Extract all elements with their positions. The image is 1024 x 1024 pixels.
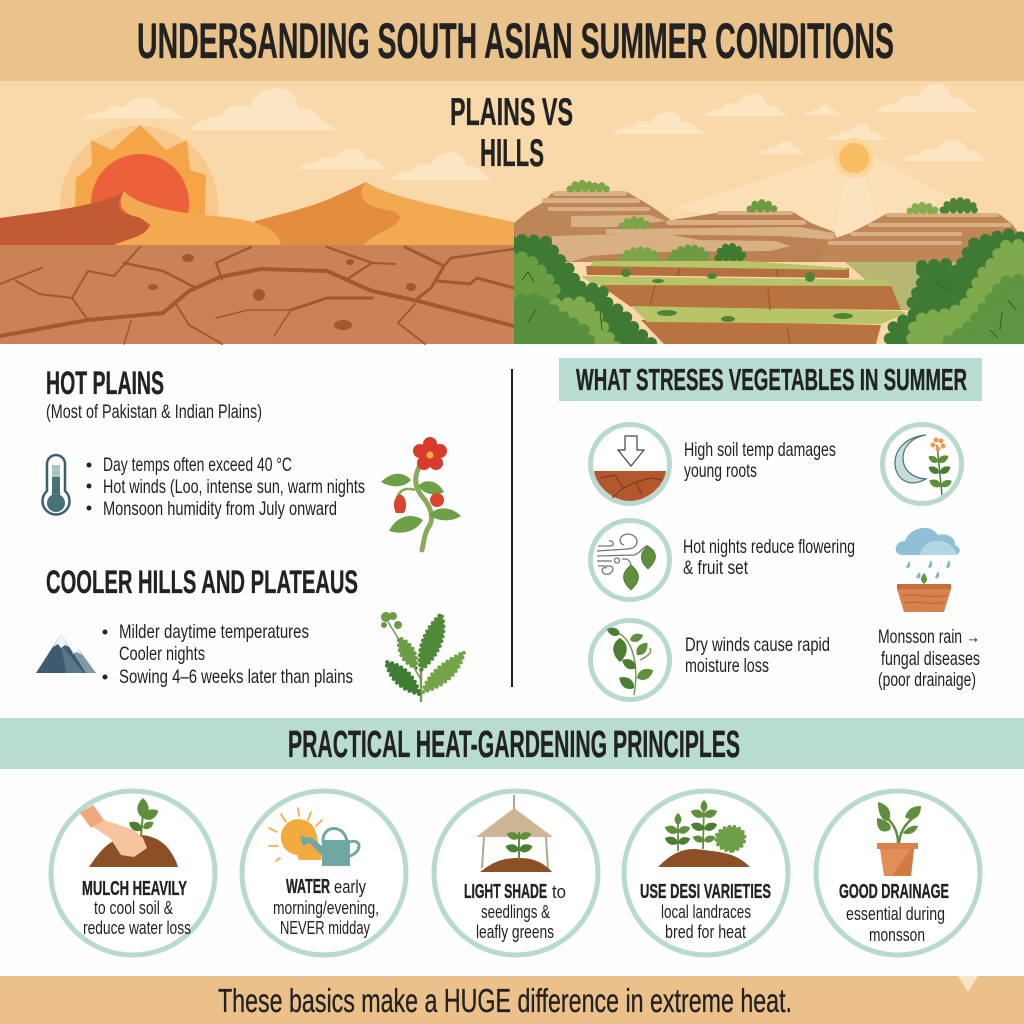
cracked earth ground [0, 245, 514, 344]
right bushes [886, 234, 1024, 350]
stress text: hot nights [683, 536, 855, 579]
text: mulch [82, 878, 191, 938]
text: mulch: reduce water loss [83, 918, 191, 938]
footer band [0, 976, 1024, 1024]
hill bushes [570, 183, 976, 258]
principle: light shade [434, 791, 598, 955]
text: water: early [334, 877, 366, 897]
bush foliage marks [522, 272, 602, 330]
header band [0, 0, 1024, 81]
stress text: soil temp [684, 439, 836, 482]
text: drainage: essential during [846, 904, 945, 924]
text: mulch: MULCH HEAVILY [82, 878, 187, 900]
stress text: dry winds [685, 634, 830, 677]
stress text: monsoon rain [878, 626, 980, 691]
text: drainage [839, 881, 949, 945]
foreground terraces [581, 261, 907, 344]
icon: blazing sun [60, 125, 218, 284]
icon: shade shelter [476, 795, 553, 872]
bullet list: hills conditions: Sowing 4–6 weeks later than plains [119, 666, 353, 688]
icon: mountains [36, 634, 96, 673]
hero scene: plains vs hills [0, 81, 1024, 350]
icon: red flowering plant [381, 437, 461, 550]
heading: hot plains: HOT PLAINS [46, 365, 164, 401]
text: water: WATER [286, 876, 330, 898]
stress text: soil temp: young roots [684, 460, 757, 482]
text: mulch: to cool soil & [94, 898, 173, 918]
stress text: monsoon rain: (poor drainaige) [878, 669, 976, 691]
icon: moon and flowering plant [882, 424, 962, 504]
icon: sun and watering can [269, 808, 359, 866]
stress text: dry winds: moisture loss [685, 655, 769, 677]
subheading: (Most of Pakistan & Indian Plains) [46, 402, 262, 423]
text: water: morning/evening, [273, 898, 379, 918]
icon: potted plant [877, 802, 921, 876]
olive meadow [845, 262, 965, 310]
icon: hand mulching [80, 798, 178, 867]
text: drainage: monsson [869, 925, 925, 945]
back-left hill [514, 191, 671, 262]
text: light shade: LIGHT SHADE [464, 881, 547, 903]
stress text: hot nights: Hot nights reduce flowering [683, 536, 855, 558]
heading: plains vs hills: PLAINS VS [450, 91, 573, 134]
principle: mulch heavily [51, 791, 215, 955]
heading: plains vs hills [450, 91, 573, 175]
icon: dry-wind vine [590, 620, 670, 700]
principle: water timing [242, 791, 406, 955]
text: desi: bred for heat [665, 922, 746, 942]
bullet list: plains conditions [86, 454, 365, 520]
icon: thermometer [43, 455, 70, 515]
bullet list: hills conditions: Cooler nights [119, 643, 205, 665]
text: desi: USE DESI VARIETIES [640, 881, 771, 903]
text: light shade: to [552, 882, 566, 902]
principle: good drainage [816, 791, 980, 955]
bullet list: plains conditions: Monsoon humidity from July onward [103, 498, 337, 520]
bullet list: hills conditions [102, 621, 353, 688]
icon: hazy hill sun [672, 138, 1000, 250]
icon: desi plants in soil [658, 800, 750, 867]
stress text: soil temp: High soil temp damages [684, 439, 836, 461]
bush foliage marks [936, 282, 1016, 338]
text: desi [640, 881, 771, 942]
panel: what stresses vegetables [559, 358, 982, 700]
icon: hot soil and arrow [590, 424, 670, 504]
text: light shade [464, 881, 566, 942]
stress text: monsoon rain: Monsson rain → [878, 626, 980, 648]
vertical divider [511, 369, 513, 687]
stress text: monsoon rain: fungal diseases [881, 648, 980, 670]
bullet list: plains conditions: Day temps often exceed 40 °C [103, 454, 292, 476]
text: drainage: GOOD DRAINAGE [839, 881, 949, 903]
icon: wind and wilting leaves [590, 520, 670, 600]
text: light shade: leafly greens [476, 922, 554, 942]
bullet list: plains conditions: Hot winds (Loo, intense sun, warm nights [103, 476, 365, 498]
text: light shade: seedlings & [481, 902, 550, 922]
back-centre hill [552, 211, 840, 262]
left bushes [510, 240, 652, 350]
back-right hill [818, 213, 1024, 262]
text: water: NEVER midday [280, 918, 370, 938]
stress text: dry winds: Dry winds cause rapid [685, 634, 830, 656]
footer text: These basics make a HUGE difference in extreme heat. [218, 982, 792, 1019]
text: desi: local landraces [661, 902, 751, 922]
panel: hot plains [36, 365, 464, 702]
terraced hills [510, 183, 1024, 350]
clouds [82, 84, 989, 180]
icon: green fern [381, 612, 464, 702]
stress text: hot nights: & fruit set [683, 557, 748, 579]
heading band: principles [0, 718, 1024, 769]
bullet list: hills conditions: Milder daytime temperatures [119, 621, 309, 643]
sand dunes [0, 182, 514, 245]
icon: rain over pot [896, 528, 960, 612]
text: water [273, 876, 379, 938]
heading: plains vs hills: HILLS [480, 132, 544, 175]
principle: desi varieties [624, 791, 788, 955]
heading: cooler hills: COOLER HILLS AND PLATEAUS [46, 564, 358, 600]
